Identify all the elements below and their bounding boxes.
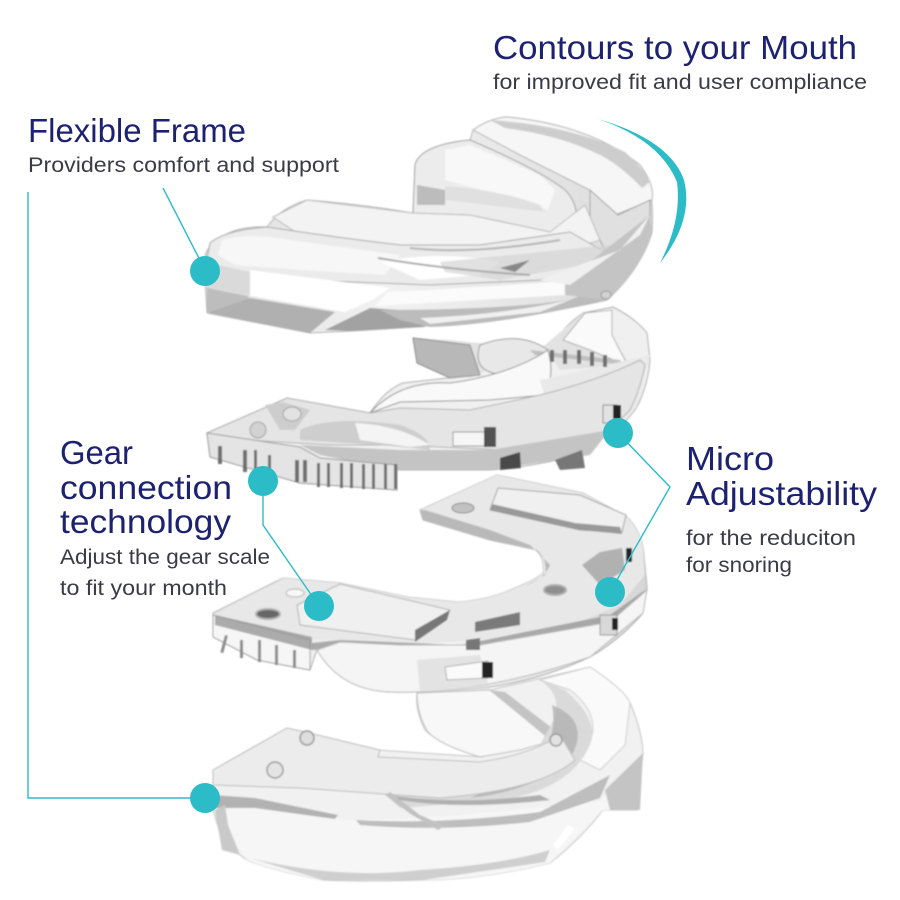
device: exploded mouthpiece layers xyxy=(204,117,652,881)
marker dots xyxy=(190,256,633,813)
text: gear connection technology: to fit your month xyxy=(60,577,227,600)
text: gear connection technology: Adjust the gear scale xyxy=(60,546,270,569)
text: micro adjustability: for snoring xyxy=(686,554,792,577)
text: contours to your mouth xyxy=(493,29,867,94)
layer: upper gear plate xyxy=(207,307,650,490)
text: flexible frame: Flexible Frame xyxy=(28,112,246,149)
text: gear connection technology: Gear xyxy=(60,434,133,471)
text: contours to your mouth: Contours to your Mouth xyxy=(493,29,857,66)
text: micro adjustability: Adjustability xyxy=(686,475,878,512)
callout line: gear connection xyxy=(263,481,319,606)
text: micro adjustability: for the reduciton xyxy=(686,527,856,550)
callout line: flexible frame to top and bottom layers xyxy=(28,188,205,798)
layer: bottom tray xyxy=(213,667,643,881)
text: micro adjustability xyxy=(686,440,878,577)
text: gear connection technology xyxy=(60,434,270,600)
text: contours to your mouth: for improved fit and user compliance xyxy=(493,71,867,94)
text: micro adjustability: Micro xyxy=(686,440,774,477)
text: flexible frame: Providers comfort and support xyxy=(28,154,339,177)
layer: top frame xyxy=(204,117,652,333)
text: flexible frame xyxy=(28,112,339,177)
callout line: micro adjustability xyxy=(610,433,670,592)
text: gear connection technology: connection xyxy=(60,469,232,506)
text: gear connection technology: technology xyxy=(60,503,232,540)
layer: lower gear plate xyxy=(213,475,647,692)
icon: contour arc xyxy=(598,119,686,263)
